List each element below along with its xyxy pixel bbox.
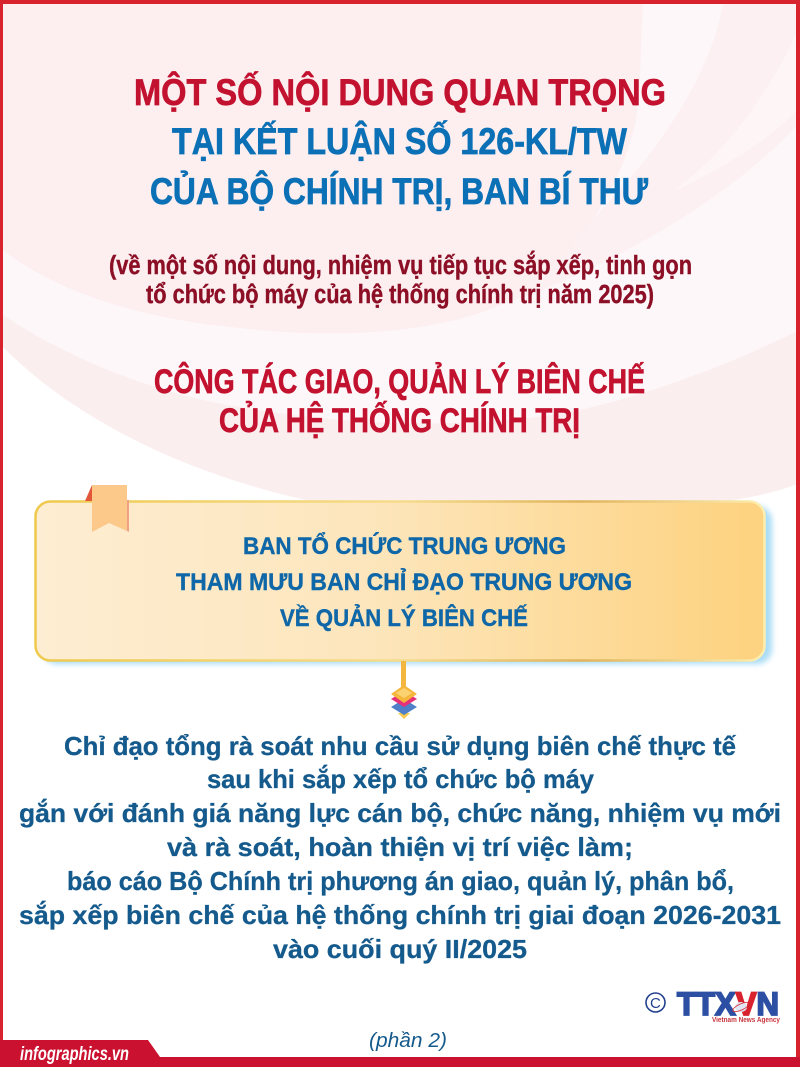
panel text: THAM MƯU BAN CHỈ ĐẠO TRUNG ƯƠNG [176,567,632,596]
footer source: infographics.vn [20,1044,129,1065]
footer bar [0,1040,800,1067]
body text: sắp xếp biên chế của hệ thống chính trị giai đoạn 2026-2031 [19,900,781,930]
section heading: CÔNG TÁC GIAO, QUẢN LÝ BIÊN CHẾ [154,362,645,401]
title: CỦA BỘ CHÍNH TRỊ, BAN BÍ THƯ [150,170,648,212]
panel text: VỀ QUẢN LÝ BIÊN CHẾ [280,603,528,632]
subtitle [109,250,692,309]
body text: báo cáo Bộ Chính trị phương án giao, quản lý, phân bổ, [67,866,734,896]
icon: layered diamonds [391,685,417,719]
panel text: BAN TỔ CHỨC TRUNG ƯƠNG [243,532,566,560]
part label: (phần 2) [369,1030,447,1052]
section heading [154,362,645,440]
body text: vào cuối quý II/2025 [273,934,527,964]
subtitle: tổ chức bộ máy của hệ thống chính trị năm 2025) [146,281,654,309]
body text: và rà soát, hoàn thiện vị trí việc làm; [167,832,633,862]
logo: TTXVN: C [650,995,661,1012]
body text: gắn với đánh giá năng lực cán bộ, chức năng, nhiệm vụ mới [19,798,781,828]
body text [19,731,781,964]
title [134,71,666,212]
panel text [176,532,632,632]
background curved shapes [3,4,797,505]
body text: Chỉ đạo tổng rà soát nhu cầu sử dụng biên chế thực tế [64,731,737,761]
logo: TTXVN: TTXVN [677,986,779,1022]
icon: bookmark [85,485,129,532]
connector line [401,661,406,689]
subtitle: (về một số nội dung, nhiệm vụ tiếp tục sắp xếp, tinh gọn [109,250,692,280]
body text: sau khi sắp xếp tổ chức bộ máy [207,764,595,794]
logo: TTXVN: Vietnam News Agency [712,1015,780,1024]
title: TẠI KẾT LUẬN SỐ 126-KL/TW [172,120,627,162]
section heading: CỦA HỆ THỐNG CHÍNH TRỊ [219,401,580,440]
title: MỘT SỐ NỘI DUNG QUAN TRỌNG [134,71,666,113]
panel: central organisation commission [36,485,772,664]
